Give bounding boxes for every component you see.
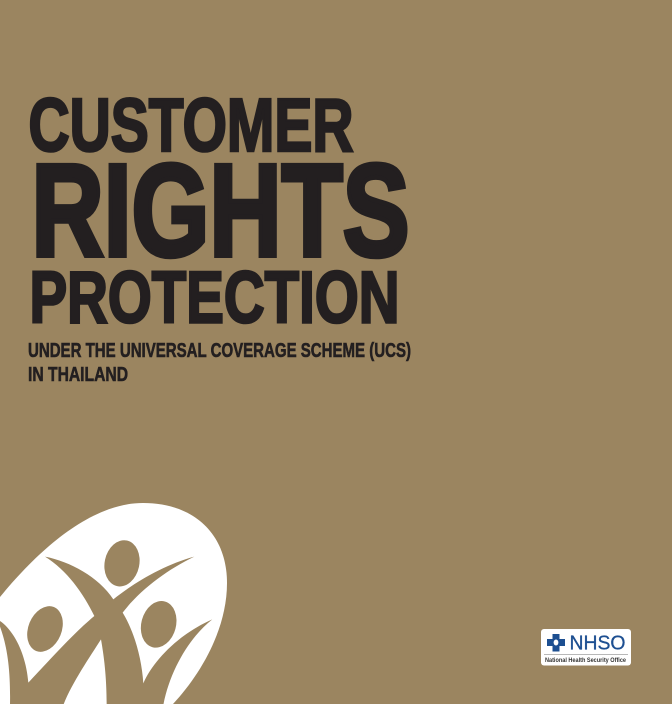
logo wordmark: NHSO — [570, 632, 626, 654]
title — [28, 83, 410, 339]
logo divider — [544, 653, 628, 656]
logo plate — [541, 629, 631, 666]
logo caption: National Health Security Office — [545, 657, 626, 664]
head: left — [21, 601, 69, 657]
head: centre — [100, 537, 144, 590]
emblem: three raised-arm figures in white oval — [0, 503, 227, 704]
head: right — [136, 597, 182, 652]
figure bodies — [0, 557, 212, 704]
logo: NHSO — [541, 629, 631, 666]
subtitle line 2: IN THAILAND — [28, 364, 128, 386]
title line: protection: PROTECTION — [30, 258, 400, 339]
figures — [0, 537, 212, 704]
white oval — [0, 503, 227, 704]
title line: customer: CUSTOMER — [28, 83, 354, 167]
icon: blue cross — [547, 634, 565, 652]
subtitle — [28, 340, 411, 386]
title line: rights: RIGHTS — [32, 136, 410, 284]
subtitle line 1: UNDER THE UNIVERSAL COVERAGE SCHEME (UCS) — [28, 340, 411, 362]
